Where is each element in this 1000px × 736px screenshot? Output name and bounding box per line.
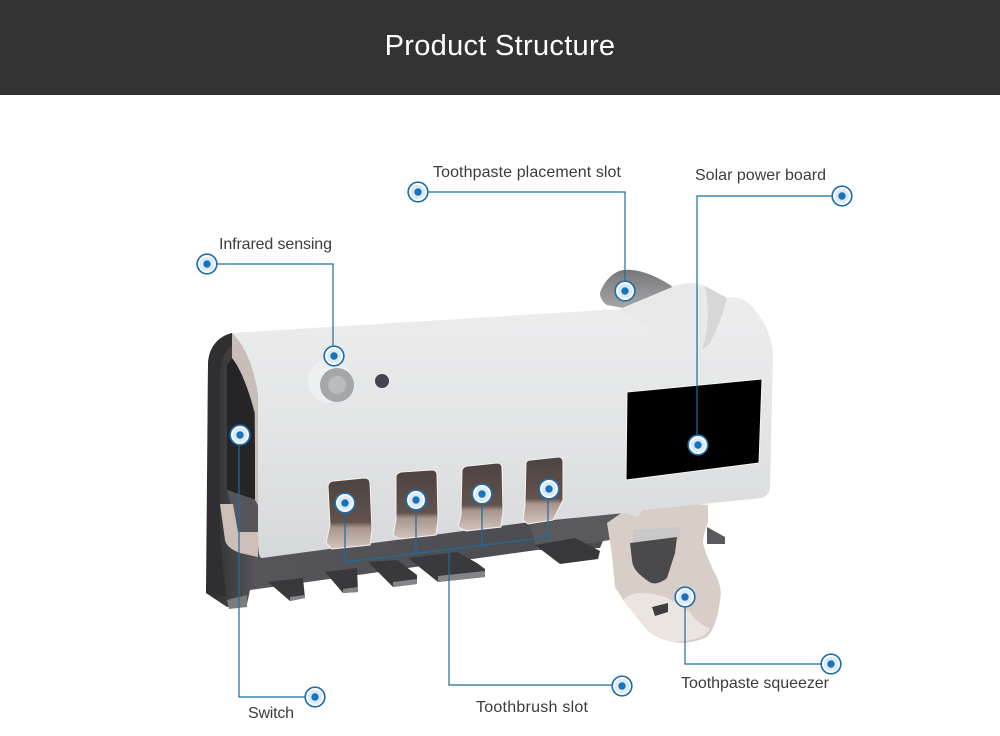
- brush hook: [220, 504, 258, 557]
- squeezer opening: [630, 537, 677, 583]
- title banner: Product Structure: [385, 30, 615, 62]
- label: solar power board: Solar power board: [695, 167, 826, 184]
- label: toothpaste squeezer: Toothpaste squeezer: [681, 675, 830, 692]
- inner rim: [232, 333, 258, 505]
- fin shading: [620, 283, 727, 352]
- toothpaste squeezer: [607, 500, 721, 643]
- squeezer window: [652, 603, 668, 616]
- brush holders: [227, 552, 485, 609]
- label: toothpaste placement slot: Toothpaste placement slot: [433, 164, 622, 181]
- side cavity: [227, 358, 256, 500]
- squeezer bracket: [633, 527, 680, 543]
- solar panel: [626, 379, 762, 480]
- right rear tab: [707, 527, 725, 544]
- rear cylinder: [530, 508, 640, 550]
- label: infrared sensing: Infrared sensing: [219, 236, 332, 253]
- callout pins: [197, 182, 852, 707]
- toothpaste slot cap: [600, 270, 673, 310]
- toothbrush dispenser: [206, 270, 773, 643]
- callout lines: [207, 192, 842, 697]
- squeezer lower lip: [623, 593, 710, 642]
- motion sensor: [308, 359, 354, 403]
- label: toothbrush slot: Toothbrush slot: [476, 699, 589, 716]
- title banner: [0, 0, 1000, 95]
- indicator light: [375, 374, 389, 388]
- rear brush holder: [535, 538, 600, 564]
- brush slots: [326, 457, 563, 549]
- back plate: [206, 333, 620, 607]
- body shell: [232, 283, 773, 558]
- label: switch: Switch: [248, 705, 294, 722]
